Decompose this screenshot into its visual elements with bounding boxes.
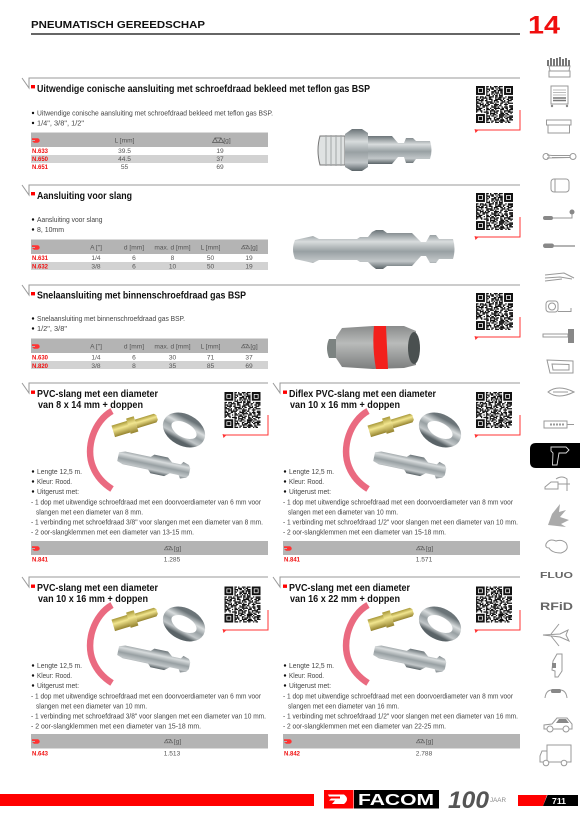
sidebar: category icons [530, 57, 580, 766]
data table: A ["] [90, 244, 102, 252]
data table: N.643 [32, 750, 48, 758]
data table: 8 [171, 255, 175, 262]
photo: quick coupler [327, 326, 420, 369]
description: Kleur: Rood. [37, 671, 72, 680]
red corner marker [474, 610, 520, 633]
data table [283, 734, 520, 758]
data table: 69 [245, 363, 253, 370]
panel heading: Aansluiting voor slang [37, 190, 132, 202]
description [32, 108, 273, 128]
data table: 85 [207, 363, 214, 370]
panel heading: PVC-slang met een diameter [289, 582, 410, 594]
description: - 2 oor-slangklemmen met een diameter van 15-18 mm. [283, 528, 446, 536]
data table: 6 [132, 354, 136, 362]
icon: car [544, 718, 572, 732]
panel heading: Snelaansluiting met binnenschroefdraad gas BSP [37, 290, 246, 302]
data table: 69 [216, 164, 224, 171]
description [31, 661, 266, 730]
data table: 6 [132, 255, 136, 262]
data table: 71 [207, 354, 214, 362]
description [32, 215, 102, 234]
data table: 8 [132, 363, 136, 370]
description: Kleur: Rood. [37, 477, 72, 486]
description: Kleur: Rood. [289, 671, 324, 680]
icon: hose ring [546, 540, 567, 553]
100 years mark [448, 787, 506, 814]
description: Kleur: Rood. [289, 477, 324, 486]
description [31, 467, 263, 536]
page title: PNEUMATISCH GEREEDSCHAP [31, 20, 205, 31]
panel heading: Diflex PVC-slang met een diameter [289, 388, 436, 400]
data table [31, 338, 268, 370]
icon: wrench [543, 154, 576, 160]
icon: tool box [546, 120, 571, 133]
photo: threaded connector [318, 129, 432, 171]
data table: 3/8 [91, 363, 101, 370]
chapter number: 14 [528, 12, 560, 40]
data table [31, 541, 268, 564]
panel heading: Uitwendige conische aansluiting met schroefdraad bekleed met teflon gas BSP [37, 83, 370, 95]
panel heading: van 16 x 22 mm + doppen [290, 593, 400, 605]
data table: 1.513 [164, 750, 181, 758]
data table: N.651 [32, 164, 48, 171]
description: Uitwendige conische aansluiting met schroefdraad bekleed met teflon gas BSP. [37, 108, 273, 118]
data table: N.820 [32, 363, 48, 370]
data table [31, 240, 268, 270]
data table: d [mm] [124, 344, 144, 350]
icon: tool cabinet [551, 86, 568, 107]
QR code [224, 587, 260, 622]
red corner marker [474, 415, 520, 438]
description: Uitgerust met: [289, 681, 331, 690]
description [283, 661, 518, 730]
panel heading: PVC-slang met een diameter [37, 388, 158, 400]
icon: hammer [543, 329, 574, 343]
100 years mark: 100 [448, 787, 490, 814]
description: - 1 dop met uitwendige schroefdraad met een doorvoerdiameter van 6 mm voor [31, 498, 262, 506]
data table: N.630 [32, 354, 48, 362]
description: slangen met een diameter van 10 mm. [36, 702, 147, 710]
FACOM logo [324, 790, 439, 809]
data table: [g] [250, 344, 258, 350]
data table: 50 [207, 264, 214, 270]
description [283, 467, 518, 536]
icon: circuit breaker [552, 654, 562, 677]
photo: hose tail connector [293, 230, 454, 269]
data table: N.650 [32, 156, 48, 163]
data table: 30 [169, 354, 176, 362]
data table: [g] [174, 738, 181, 746]
data table: L [mm] [201, 244, 221, 252]
data table: 19 [245, 255, 253, 262]
description: Lengte 12,5 m. [289, 661, 334, 670]
red corner marker [474, 317, 520, 340]
panel: PVC hose 8 x 14 [22, 383, 268, 564]
data table: [g] [250, 244, 258, 252]
description: - 1 verbinding met schroefdraad 1/2" voor slangen met een diameter van 16 mm. [283, 712, 518, 720]
data table: N.842 [284, 750, 300, 758]
panel heading [37, 582, 158, 605]
data table: N.841 [284, 556, 300, 564]
panel heading [289, 388, 436, 411]
data table: 37 [216, 156, 224, 163]
photo: hose and fittings [90, 410, 205, 489]
data table: N.633 [32, 148, 48, 155]
panel: conical connector [22, 78, 520, 171]
icon: vise [545, 477, 570, 491]
icon: tape measure [546, 301, 571, 312]
panel heading: PVC-slang met een diameter [37, 582, 158, 594]
panel heading [289, 582, 410, 605]
panel heading: van 8 x 14 mm + doppen [38, 399, 143, 411]
description: - 2 oor-slangklemmen met een diameter van 15-18 mm. [31, 722, 201, 730]
data table: [g] [223, 138, 231, 144]
data table: 35 [169, 363, 176, 370]
icon: tool set [548, 57, 570, 77]
page header [31, 12, 560, 40]
icon: screwdriver handle [543, 210, 574, 220]
description: Lengte 12,5 m. [289, 467, 334, 476]
QR code [224, 393, 260, 427]
red corner marker [222, 415, 268, 438]
data table: 1.285 [164, 556, 181, 564]
data table: N.632 [32, 264, 48, 270]
data table: max. d [mm] [154, 344, 191, 350]
panel heading [37, 388, 158, 411]
QR code [476, 294, 513, 329]
description: slangen met een diameter van 10 mm. [288, 508, 398, 516]
panel: PVC hose 16 x 22 [273, 577, 520, 758]
description: Uitgerust met: [37, 681, 79, 690]
icon: airplane [543, 624, 569, 646]
data table: 3/8 [91, 264, 101, 270]
icon: FLUO: FLUO [540, 570, 574, 580]
data table: A ["] [90, 344, 102, 350]
photo: hose and fittings [90, 604, 205, 683]
QR code [476, 194, 513, 229]
QR code [476, 393, 512, 427]
data table: max. d [mm] [154, 244, 191, 252]
description: - 1 verbinding met schroefdraad 1/2" voor slangen met een diameter van 10 mm. [283, 518, 518, 526]
icon: pliers [545, 273, 574, 281]
data table: [g] [426, 546, 433, 552]
description: - 1 verbinding met schroefdraad 3/8" voor slangen met een diameter van 8 mm. [31, 518, 263, 526]
description: Uitgerust met: [37, 487, 79, 496]
data table: 1/4 [91, 354, 101, 362]
icon: RFID: RFiD [540, 601, 573, 613]
data table: 55 [121, 164, 128, 171]
red corner marker [474, 217, 520, 240]
description: - 1 dop met uitwendige schroefdraad met een doorvoerdiameter van 8 mm voor [283, 692, 514, 700]
data table: [g] [174, 546, 181, 552]
description: 8, 10mm [37, 225, 64, 234]
description: 1/4", 3/8", 1/2" [37, 118, 84, 128]
icon: gloves and safety [548, 504, 569, 527]
description: - 1 dop met uitwendige schroefdraad met een doorvoerdiameter van 6 mm voor [31, 692, 262, 700]
description: - 1 verbinding met schroefdraad 3/8" voor slangen met een diameter van 10 mm. [31, 712, 266, 720]
data table [283, 541, 520, 564]
QR code [476, 587, 512, 622]
photo: hose and fittings [346, 410, 461, 489]
description: - 2 oor-slangklemmen met een diameter van 13-15 mm. [31, 528, 194, 536]
data table: 10 [169, 264, 176, 270]
page number tab [518, 795, 578, 806]
panel heading: van 10 x 16 mm + doppen [38, 593, 148, 605]
data table: N.841 [32, 556, 48, 564]
icon: saw [547, 360, 573, 373]
data table: L [mm] [201, 344, 221, 350]
FACOM logo: FACOM [358, 792, 434, 809]
data table: 2.788 [416, 750, 433, 758]
data table: 50 [207, 255, 214, 262]
panel: Diflex PVC hose 10 x 16 [273, 383, 520, 564]
data table: 37 [245, 354, 253, 362]
panel: quick coupler [22, 285, 520, 370]
data table: 1/4 [91, 255, 101, 262]
icon: cutters [548, 388, 574, 396]
icon: handle [545, 689, 567, 698]
data table: 6 [132, 264, 136, 270]
data table: 1.571 [416, 556, 433, 564]
icon: power strip [544, 421, 574, 428]
data table: 19 [216, 148, 224, 155]
description: 1/2", 3/8" [37, 324, 67, 333]
description: - 2 oor-slangklemmen met een diameter van 22-25 mm. [283, 722, 446, 730]
description [32, 314, 185, 333]
icon: active tab with air gun [530, 443, 580, 468]
data table: d [mm] [124, 244, 144, 252]
panel heading: van 10 x 16 mm + doppen [290, 399, 400, 411]
page number tab: 711 [552, 796, 566, 806]
panel: hose connector [22, 185, 520, 270]
icon: truck [540, 745, 571, 766]
data table [31, 734, 268, 758]
description: Lengte 12,5 m. [37, 467, 82, 476]
photo: hose and fittings [346, 604, 461, 683]
icon: screwdriver [543, 244, 575, 248]
data table: 19 [245, 264, 253, 270]
icon: socket [551, 179, 569, 192]
description: Lengte 12,5 m. [37, 661, 82, 670]
description: Aansluiting voor slang [37, 215, 102, 224]
panel: PVC hose 10 x 16 [22, 577, 268, 758]
QR code [476, 87, 513, 122]
data table: 39.5 [118, 148, 131, 155]
description: slangen met een diameter van 16 mm. [288, 702, 399, 710]
footer [0, 787, 578, 814]
description: slangen met een diameter van 8 mm. [36, 508, 143, 516]
100 years mark: JAAR [490, 797, 506, 804]
data table: L [mm] [115, 138, 135, 144]
description: Snelaansluiting met binnenschroefdraad gas BSP. [37, 314, 185, 323]
data table [31, 132, 268, 171]
description: Uitgerust met: [289, 487, 331, 496]
red corner marker [474, 110, 520, 133]
description: - 1 dop met uitwendige schroefdraad met een doorvoerdiameter van 8 mm voor [283, 498, 514, 506]
data table: [g] [426, 738, 433, 746]
data table: N.631 [32, 255, 48, 262]
red corner marker [222, 610, 268, 633]
data table: 44.5 [118, 156, 131, 163]
